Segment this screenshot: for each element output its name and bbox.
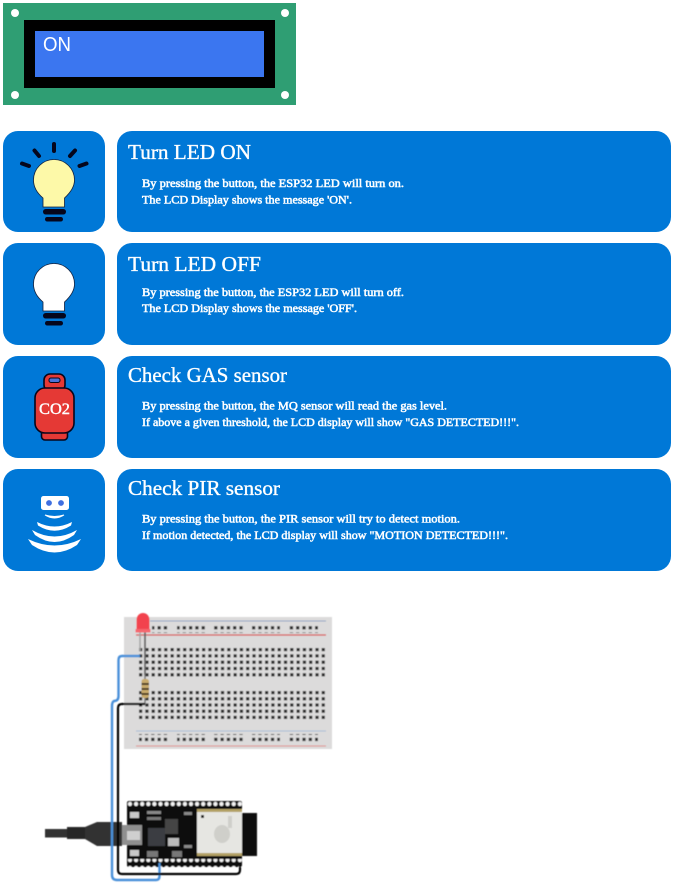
- circuit diagram: [45, 613, 332, 880]
- description: By pressing the button, the ESP32 LED will turn on.: [142, 176, 404, 190]
- icon: motion sensor waves: [28, 496, 81, 552]
- icon tile: LED on: [3, 131, 105, 232]
- description: If motion detected, the LCD display will show "MOTION DETECTED!!!".: [142, 528, 508, 542]
- wire: black: [118, 704, 240, 874]
- icon: unlit bulb: [34, 264, 74, 326]
- description: The LCD Display shows the message 'ON'.: [142, 192, 352, 206]
- panel: Check PIR sensor: [117, 469, 671, 571]
- description: By pressing the button, the MQ sensor will read the gas level.: [142, 398, 447, 412]
- heading: Turn LED ON: [128, 140, 251, 164]
- ESP32 board: [127, 801, 257, 867]
- resistor: [142, 672, 149, 705]
- heading: Check GAS sensor: [128, 363, 287, 387]
- LCD display: [3, 3, 296, 105]
- icon: glowing bulb: [22, 144, 86, 222]
- icon tile: LED off: [3, 243, 105, 345]
- description: The LCD Display shows the message 'OFF'.: [142, 301, 357, 315]
- USB cable: [45, 822, 142, 846]
- icon tile: gas sensor: [3, 356, 105, 458]
- icon tile: PIR sensor: [3, 469, 105, 571]
- heading: Turn LED OFF: [128, 252, 261, 276]
- description: By pressing the button, the PIR sensor will try to detect motion.: [142, 512, 460, 526]
- LED: [136, 613, 150, 675]
- breadboard: [124, 617, 332, 749]
- wire: blue: [112, 656, 160, 880]
- panel: Check GAS sensor: [117, 356, 671, 458]
- heading: Check PIR sensor: [128, 476, 280, 500]
- icon: CO2 gas cylinder: CO2: [39, 401, 70, 418]
- panel: Turn LED OFF: [117, 243, 671, 345]
- panel: Turn LED ON: [117, 131, 671, 232]
- LCD text: ON: [43, 34, 71, 56]
- description: If above a given threshold, the LCD display will show "GAS DETECTED!!!".: [142, 415, 519, 429]
- description: By pressing the button, the ESP32 LED will turn off.: [142, 285, 404, 299]
